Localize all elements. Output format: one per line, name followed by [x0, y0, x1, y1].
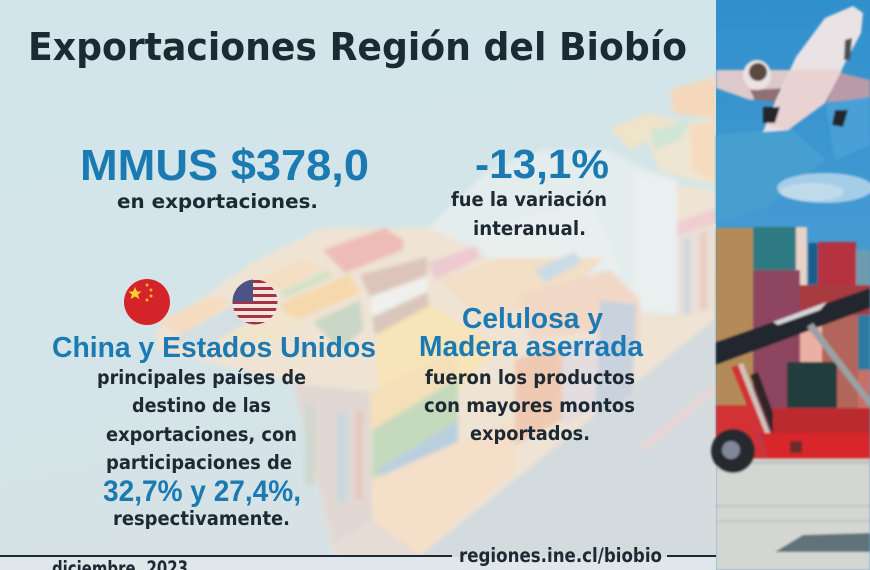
right tall stack — [677, 208, 716, 318]
upper right stacks — [670, 76, 716, 118]
mid deck rows — [428, 246, 480, 280]
title: Exportaciones Región del Biobío — [28, 25, 687, 69]
panel: photo of plane and port — [711, 0, 870, 570]
block: destination countries: 32,7% y 27,4%, — [103, 475, 301, 508]
stat: export total: MMUS $378,0 — [80, 141, 369, 190]
front stack — [293, 383, 372, 545]
stat: year-on-year variation: interanual. — [473, 217, 586, 240]
hull and deck base — [423, 318, 716, 570]
stat: year-on-year variation: -13,1% — [475, 141, 609, 187]
block: destination countries — [52, 332, 376, 530]
icon: airplane — [716, 6, 870, 132]
block: destination countries: principales países de — [97, 366, 306, 389]
block: main products: Madera aserrada — [419, 331, 644, 363]
stat: export total — [80, 141, 369, 213]
block: main products: con mayores montos — [424, 394, 635, 417]
container stacks — [716, 395, 870, 461]
footer — [0, 544, 716, 570]
upper deck rows — [323, 228, 403, 273]
block: destination countries: participaciones de — [106, 451, 292, 474]
block: destination countries: respectivamente. — [113, 507, 290, 530]
block: main products: exportados. — [470, 422, 590, 445]
icon: red reach stacker — [711, 288, 870, 570]
container ghost in sky — [716, 128, 826, 225]
block: main products: fueron los productos — [425, 366, 635, 389]
superstructure — [428, 150, 677, 315]
clouds — [777, 173, 870, 203]
stat: year-on-year variation — [451, 141, 609, 240]
stat: export total: en exportaciones. — [117, 190, 318, 213]
icon: United States flag — [232, 279, 278, 325]
block: destination countries: destino de las — [132, 394, 271, 417]
concrete ground — [716, 459, 870, 570]
block: main products: Celulosa y — [462, 303, 603, 335]
footer: regiones.ine.cl/biobio — [459, 544, 662, 567]
stat: year-on-year variation: fue la variación — [451, 188, 607, 211]
block: main products — [419, 303, 644, 445]
block: destination countries: China y Estados Unidos — [52, 332, 376, 364]
icon: China flag — [124, 279, 170, 325]
block: destination countries: exportaciones, con — [106, 423, 297, 446]
